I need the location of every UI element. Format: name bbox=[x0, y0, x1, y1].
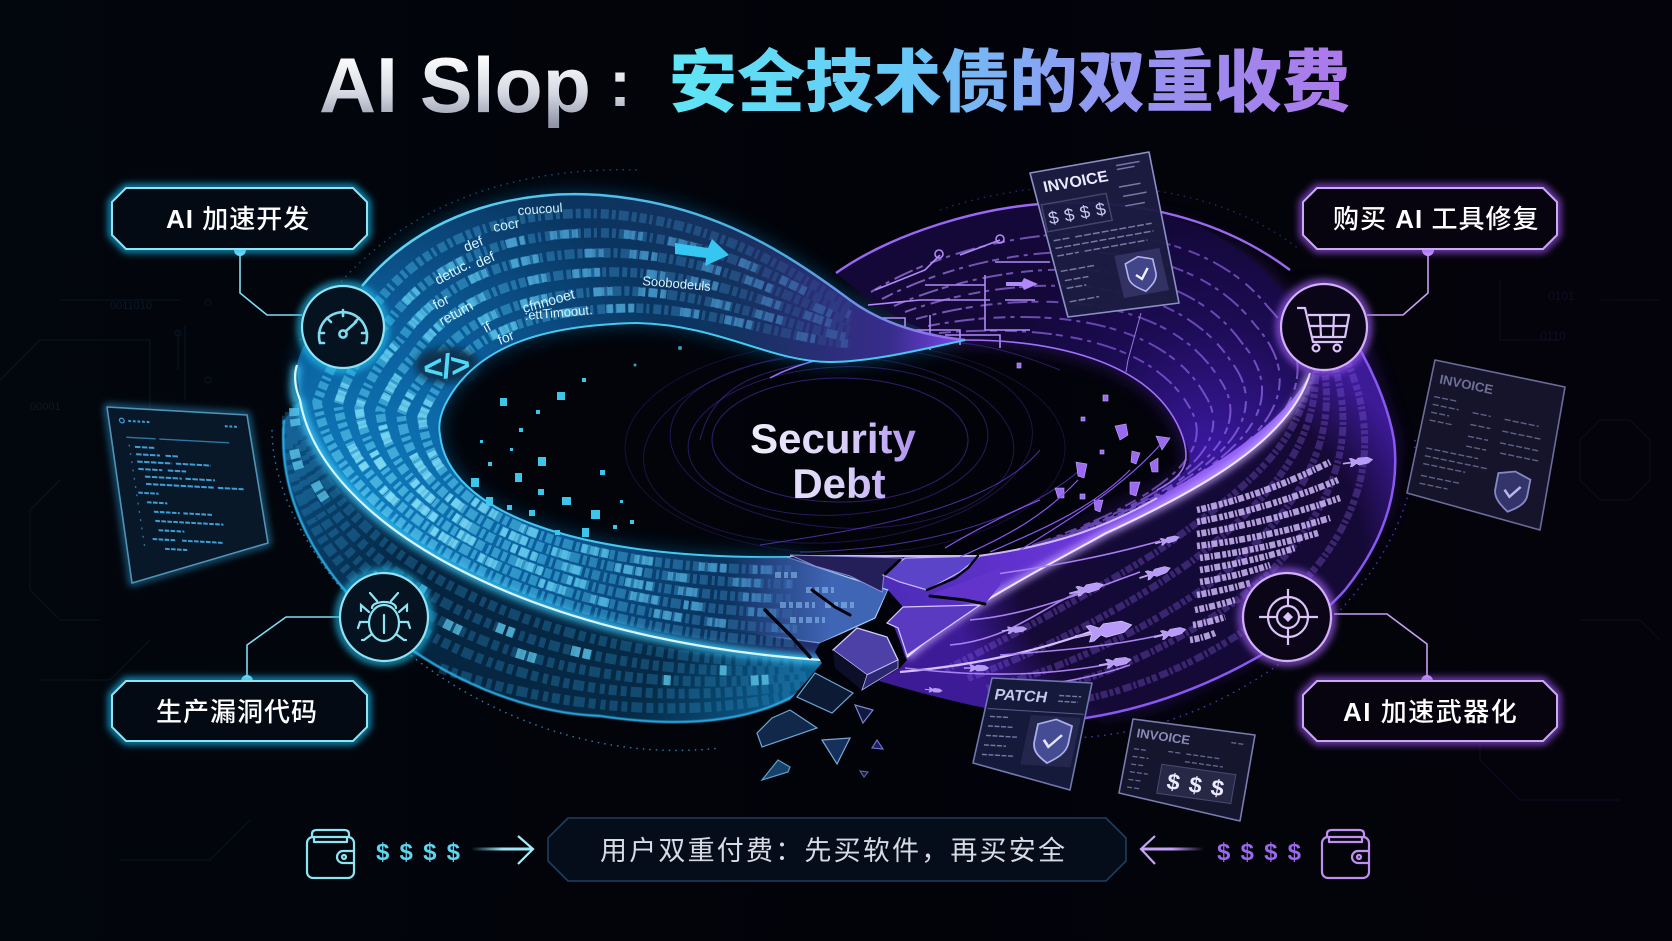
callout text: 生产漏洞代码 bbox=[156, 697, 318, 727]
banner text: 用户双重付费：先买软件，再买安全 bbox=[600, 829, 1067, 868]
faint circuit decoration: left: 00001 bbox=[30, 401, 61, 413]
callout box bbox=[112, 188, 367, 249]
code text on ribbon: return bbox=[436, 297, 476, 329]
shield icon bbox=[1030, 718, 1073, 764]
card body bbox=[107, 407, 268, 583]
floating card: patch bbox=[973, 678, 1092, 790]
blue outer wall bbox=[283, 400, 822, 722]
purple upper surface bbox=[836, 203, 1314, 557]
callout box glow bbox=[112, 681, 367, 741]
purple slab right bbox=[930, 568, 1000, 604]
callout text: 购买 AI 工具修复 bbox=[1333, 204, 1539, 234]
faint circuit decoration: left bbox=[0, 300, 250, 860]
icon: shopping cart bbox=[1280, 283, 1368, 371]
debris bbox=[757, 673, 883, 780]
code text on ribbon: detuc. bbox=[432, 256, 473, 288]
callout connector bbox=[1334, 614, 1433, 681]
dollars right: $$$$ bbox=[1217, 839, 1302, 866]
card contents: $ bbox=[1165, 768, 1182, 795]
code text on ribbon: def bbox=[461, 233, 485, 255]
hole rim bbox=[439, 323, 965, 557]
wall tile rows bbox=[287, 404, 808, 708]
surface streak rows bbox=[871, 233, 1298, 551]
icon: speed gauge bbox=[301, 285, 385, 369]
circuit traces on the twist bbox=[850, 235, 1050, 350]
card contents: $$$$ bbox=[1046, 199, 1108, 228]
callout box glow bbox=[1303, 681, 1557, 741]
ribbon outer dotted orbits bbox=[272, 170, 1415, 750]
callout box bbox=[112, 681, 367, 741]
callout box glow bbox=[1303, 188, 1557, 249]
wedge surface bbox=[850, 373, 1310, 660]
icon: bug bbox=[339, 572, 429, 662]
callout text: AI 加速武器化 bbox=[1343, 697, 1518, 727]
security debt centre label: Debt bbox=[792, 460, 886, 507]
card contents bbox=[1416, 371, 1551, 516]
purple bright wedge bbox=[790, 373, 1310, 660]
icon: target bbox=[1242, 572, 1332, 662]
data particles: purple bbox=[945, 363, 1170, 557]
slab tiles bbox=[775, 575, 855, 620]
dark top slab bbox=[790, 555, 902, 592]
purple outer wall bbox=[876, 283, 1395, 720]
callout: 购买 AI 工具修复 bbox=[1303, 188, 1557, 315]
wall bright tiles bbox=[290, 408, 806, 682]
twist colour shift bbox=[297, 194, 965, 663]
title: chinese part: 安全技术债的双重收费 bbox=[669, 27, 1350, 126]
callout box glow bbox=[112, 188, 367, 249]
streak trails bbox=[945, 445, 1160, 557]
callout connector bbox=[1367, 250, 1434, 315]
bright edge line bbox=[295, 365, 822, 660]
wall fill bbox=[283, 400, 822, 722]
blue upper surface bbox=[295, 194, 965, 663]
floating card: invoice top bbox=[1030, 152, 1179, 317]
card body glow bbox=[107, 407, 268, 583]
security debt centre label bbox=[750, 415, 917, 507]
callout: 生产漏洞代码 bbox=[112, 617, 367, 741]
code text on ribbon: coucoul bbox=[517, 200, 563, 218]
dark backing for code brackets bbox=[415, 347, 479, 383]
code lines bbox=[119, 418, 258, 557]
purple rim of top edge bbox=[836, 203, 1290, 273]
faint circuit decoration: right: 0101 bbox=[1548, 289, 1575, 303]
code text on ribbon: :ettTimoout. bbox=[524, 302, 593, 323]
faint circuit decoration: right bbox=[1480, 280, 1660, 800]
card contents: INVOICE bbox=[1135, 726, 1192, 748]
callout: AI 加速武器化 bbox=[1303, 614, 1557, 741]
mobius ribbon bbox=[272, 170, 1415, 780]
card body bbox=[1407, 360, 1565, 530]
dark fissure bbox=[757, 590, 907, 733]
callout connector bbox=[241, 617, 340, 681]
arrow left bbox=[471, 836, 533, 864]
small rocket on upper surface bbox=[1006, 278, 1038, 290]
card contents: INVOICE bbox=[1438, 372, 1495, 397]
centre shard bbox=[833, 628, 898, 690]
card contents: PATCH bbox=[993, 687, 1049, 706]
wall code lines bbox=[945, 321, 1365, 706]
lilac blue broken slab bbox=[730, 557, 888, 643]
faint circuit decoration: right: 0110 bbox=[1540, 329, 1566, 343]
wall outer rim bbox=[1020, 285, 1395, 720]
icon: wallet right bbox=[1322, 830, 1369, 878]
surface fill bbox=[836, 203, 1314, 557]
code text on ribbon: Soobodeuls bbox=[642, 273, 712, 294]
bottom banner bbox=[548, 818, 1126, 881]
code text on ribbon: for bbox=[495, 327, 517, 348]
card contents: $ bbox=[1209, 774, 1226, 801]
title bbox=[319, 27, 1350, 129]
callout box bbox=[1303, 188, 1557, 249]
code text on ribbon: cocr bbox=[492, 215, 521, 235]
code text on ribbon: cfnnooet bbox=[520, 286, 577, 316]
card contents: INVOICE bbox=[1042, 168, 1110, 196]
connector from invoice to ribbon bbox=[1126, 313, 1141, 372]
card body bbox=[973, 678, 1092, 790]
wedge flat top edge bbox=[790, 498, 1157, 556]
surface fill bbox=[297, 194, 965, 663]
floating card: invoice right bbox=[1407, 360, 1565, 530]
title: colon: : bbox=[609, 46, 631, 120]
title: latin part: AI Slop bbox=[319, 41, 591, 129]
rockets flying through wall bbox=[900, 455, 1373, 693]
data particles: blue bbox=[471, 346, 682, 537]
crack and shards bbox=[730, 555, 1000, 780]
code text on ribbon: if bbox=[480, 318, 494, 336]
code text on ribbon bbox=[430, 200, 712, 348]
wall fill bbox=[876, 283, 1395, 719]
purple cracked piece bbox=[887, 605, 980, 655]
card body bbox=[1030, 152, 1179, 317]
tile rows bbox=[317, 213, 850, 643]
card contents bbox=[1036, 161, 1169, 309]
code brackets icon: </> bbox=[421, 346, 471, 388]
twist fade over tiles bbox=[740, 232, 965, 362]
faint circuit decoration: left: 0011010 bbox=[110, 300, 152, 312]
card contents: $ bbox=[1187, 771, 1204, 798]
purple slab top right bbox=[883, 556, 980, 590]
icon: wallet left bbox=[307, 830, 354, 878]
card body bbox=[1119, 719, 1255, 821]
shield icon bbox=[1124, 254, 1160, 294]
callout text: AI 加速开发 bbox=[166, 204, 310, 234]
floating card: code panel bbox=[107, 407, 268, 583]
arrow right bbox=[1141, 836, 1204, 864]
wall bottom rim bbox=[283, 420, 815, 722]
shield icon bbox=[1492, 468, 1531, 515]
callout: AI 加速开发 bbox=[112, 188, 367, 315]
bright edge glow bbox=[295, 365, 822, 660]
callout connector bbox=[234, 250, 302, 315]
dollars left: $$$$ bbox=[376, 839, 461, 866]
card contents bbox=[1127, 726, 1244, 804]
purple rim of hole bbox=[965, 340, 1186, 490]
wedge glow edge bbox=[907, 373, 1310, 657]
bright edge line bbox=[907, 373, 1310, 657]
crack lines bbox=[765, 556, 985, 657]
floating card: invoice bottom bbox=[1119, 719, 1255, 821]
hole: swirl around security debt bbox=[625, 333, 1080, 559]
code text on ribbon: def bbox=[473, 248, 497, 271]
callout box bbox=[1303, 681, 1557, 741]
code text on ribbon: for bbox=[430, 291, 452, 313]
soft glow under ribbon bbox=[297, 194, 1394, 718]
bright tile overlay bbox=[338, 233, 850, 629]
top edge bbox=[362, 194, 965, 340]
banner box bbox=[548, 818, 1126, 881]
wall bright text rows bbox=[1190, 462, 1340, 640]
direction arrow bbox=[675, 239, 729, 266]
security debt centre label: Security bbox=[750, 415, 917, 462]
rocket trails bbox=[900, 541, 1165, 685]
